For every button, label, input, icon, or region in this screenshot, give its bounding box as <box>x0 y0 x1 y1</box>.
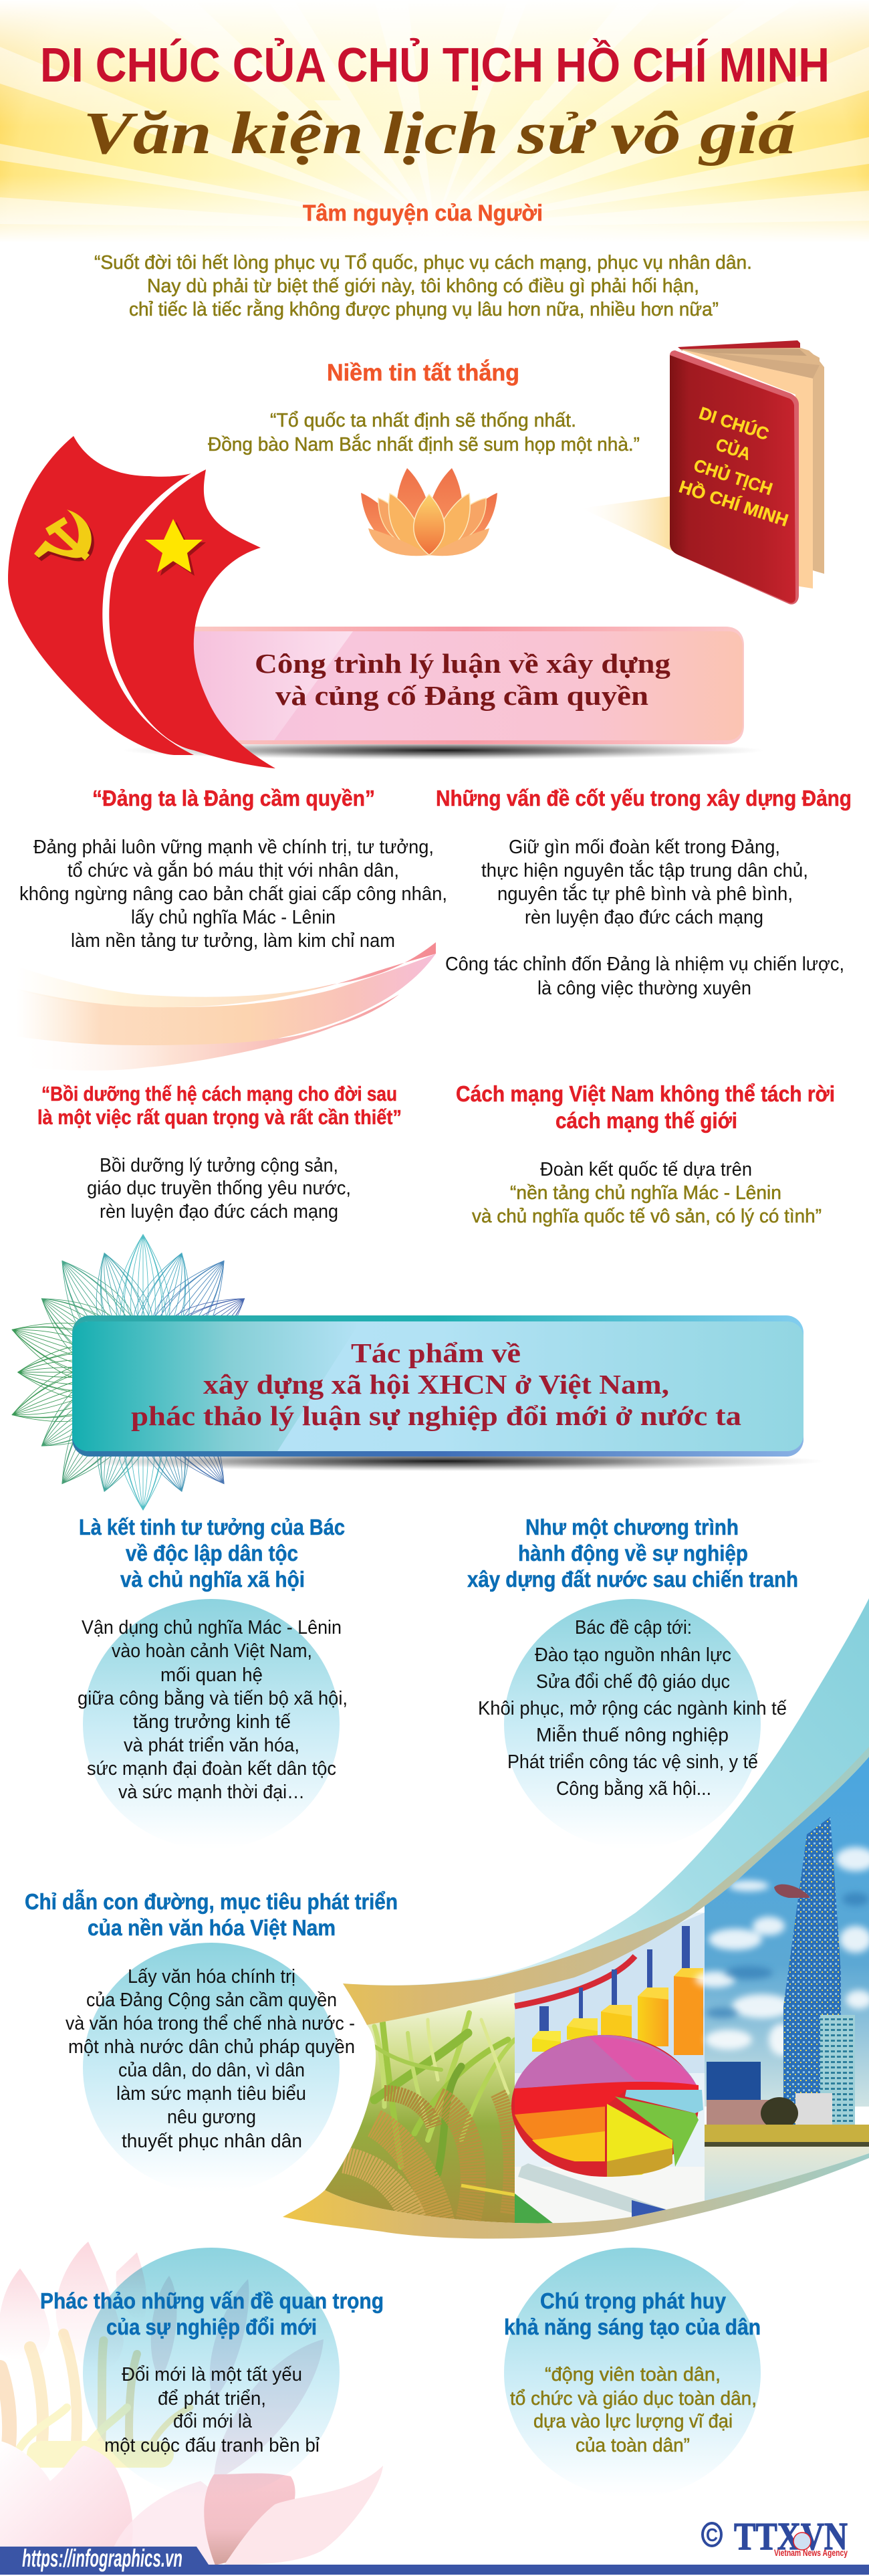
book cover text: CỦA <box>713 433 753 464</box>
column heading: Cách mạng Việt Nam: Cách mạng Việt Nam không thể tách rời <box>456 1081 835 1106</box>
banner heading: phác thảo lý luận sự nghiệp đổi mới ở nước ta <box>131 1400 741 1431</box>
decorative ellipse culture <box>83 1943 340 2193</box>
text block: xây dựng Đảng: Giữ gìn mối đoàn kết trong Đảng, <box>509 837 780 858</box>
text block: Đổi mới: để phát triển, <box>158 2388 266 2409</box>
text block: Bác đề cập tới: Khôi phục, mở rộng các ngành kinh tế <box>478 1698 787 1719</box>
text block: xây dựng Đảng: nguyên tắc tự phê bình và phê bình, <box>497 883 793 905</box>
text block: văn hóa: một nhà nước dân chủ pháp quyền <box>68 2036 355 2058</box>
book cover text: HỒ CHÍ MINH <box>676 476 791 530</box>
logo: TTXVN: C <box>706 2525 718 2545</box>
heading: Như một chương trình: Như một chương trình <box>525 1515 739 1539</box>
icon: red flag ribbon <box>8 436 275 768</box>
heading: Chỉ dẫn con đường: Chỉ dẫn con đường, mục tiêu phát triển <box>25 1889 398 1914</box>
sunburst header background <box>0 0 869 243</box>
panel: blue banner <box>72 1315 803 1457</box>
panel: pink banner <box>187 627 744 744</box>
heading: Là kết tinh tư tưởng: Là kết tinh tư tưởng của Bác <box>79 1515 345 1539</box>
heading: Như một chương trình <box>467 1515 798 1592</box>
text block: Đoàn kết quốc tế: Đoàn kết quốc tế dựa trên <box>540 1159 752 1180</box>
heading: Chú trọng phát huy: Chú trọng phát huy <box>540 2288 727 2313</box>
heading: Chú trọng phát huy <box>504 2288 761 2339</box>
text block: Vận dụng: vào hoàn cảnh Việt Nam, <box>112 1640 312 1662</box>
heading: Phác thảo: của sự nghiệp đổi mới <box>106 2315 317 2339</box>
text block: Đảng cầm quyền <box>19 837 447 952</box>
quote: động viên toàn dân: dựa vào lực lượng vĩ đại <box>533 2411 733 2432</box>
decorative shadow under blue banner <box>62 1451 824 1471</box>
heading: Phác thảo: Phác thảo những vấn đề quan trọng <box>40 2288 384 2313</box>
text block: Vận dụng: mối quan hệ <box>160 1665 263 1686</box>
text block: xây dựng Đảng <box>445 837 844 999</box>
text block: Đảng cầm quyền: làm nền tảng tư tưởng, làm kim chỉ nam <box>71 930 395 952</box>
text block: Bác đề cập tới: Công bằng xã hội... <box>556 1778 711 1800</box>
quote: niềm tin: Đồng bào Nam Bắc nhất định sẽ sum họp một nhà.” <box>208 433 640 455</box>
text block: xây dựng Đảng: rèn luyện đạo đức cách mạng <box>525 907 763 928</box>
column heading: Bồi dưỡng thế hệ: là một việc rất quan trọng và rất cần thiết” <box>37 1105 402 1129</box>
quote: tâm nguyện: Nay dù phải từ biệt thế giới này, tôi không có điều gì phải hối hận, <box>147 276 699 297</box>
text block: văn hóa: thuyết phục nhân dân <box>122 2131 302 2152</box>
text block: Đoàn kết quốc tế <box>472 1159 822 1227</box>
light beam behind book <box>582 496 675 552</box>
text block: Bác đề cập tới: Đào tạo nguồn nhân lực <box>535 1644 731 1666</box>
text block: Vận dụng <box>78 1617 348 1803</box>
icon: orange lotus <box>361 468 497 556</box>
photo collage: rice, charts, city <box>321 1752 869 2234</box>
text block: Vận dụng: và sức mạnh thời đại… <box>118 1782 305 1803</box>
text block: văn hóa <box>66 1966 355 2152</box>
banner heading: và củng cố Đảng cầm quyền <box>275 680 648 711</box>
heading: Chỉ dẫn con đường: của nền văn hóa Việt Nam <box>88 1915 336 1940</box>
icon: teal line lotus mandala <box>4 1235 260 1510</box>
heading: Là kết tinh tư tưởng: về độc lập dân tộc <box>126 1541 298 1566</box>
heading: Niềm tin tất thắng: Niềm tin tất thắng <box>327 359 519 386</box>
text block: Đảng cầm quyền: Đảng phải luôn vững mạnh về chính trị, tư tưởng, <box>33 837 434 858</box>
text block: Đảng cầm quyền: lấy chủ nghĩa Mác - Lênin <box>131 907 336 928</box>
decorative ellipse left <box>83 1599 340 1849</box>
photo: rice field <box>321 1993 516 2234</box>
quote: tâm nguyện: chỉ tiếc là tiếc rằng không được phụng vụ lâu hơn nữa, nhiều hơn nữa” <box>129 298 719 320</box>
quote: tâm nguyện: “Suốt đời tôi hết lòng phục vụ Tổ quốc, phục vụ cách mạng, phục vụ nhân dân. <box>94 252 752 274</box>
text block: văn hóa: Lấy văn hóa chính trị <box>128 1966 295 1988</box>
column heading: Bồi dưỡng thế hệ <box>37 1082 402 1129</box>
text block: Đoàn kết quốc tế: và chủ nghĩa quốc tế vô sản, có lý có tình” <box>472 1206 822 1227</box>
column heading: Cách mạng Việt Nam <box>456 1081 835 1133</box>
decorative shadow under pink banner <box>122 741 764 760</box>
text block: Bác đề cập tới: Miễn thuế nông nghiệp <box>536 1724 729 1746</box>
photo: charts <box>511 1913 705 2234</box>
heading: Như một chương trình: hành động về sự nghiệp <box>518 1541 748 1566</box>
text block: xây dựng Đảng: là công việc thường xuyên <box>537 978 751 999</box>
heading: Phác thảo <box>40 2288 384 2339</box>
subtitle: Văn kiện lịch sử vô giá <box>83 100 796 167</box>
decorative ellipse đổi mới <box>83 2248 340 2498</box>
text block: Bồi dưỡng: Bồi dưỡng lý tưởng cộng sản, <box>100 1155 338 1176</box>
column heading: Đảng ta là Đảng cầm quyền: “Đảng ta là Đảng cầm quyền” <box>92 786 375 811</box>
book cover text <box>676 403 791 530</box>
column heading: Cách mạng Việt Nam: cách mạng thế giới <box>555 1108 737 1133</box>
heading: Như một chương trình: xây dựng đất nước sau chiến tranh <box>467 1567 798 1592</box>
text block: Bồi dưỡng <box>87 1155 351 1222</box>
quote: tâm nguyện <box>94 252 752 320</box>
logo: TTXVN <box>703 2514 848 2558</box>
text block: Bồi dưỡng: rèn luyện đạo đức cách mạng <box>100 1201 338 1222</box>
heading: Tâm nguyện của Người: Tâm nguyện của Người <box>303 201 543 226</box>
quote: động viên toàn dân: “động viên toàn dân, <box>545 2364 721 2385</box>
banner heading <box>131 1337 741 1431</box>
text block: Vận dụng: và phát triển văn hóa, <box>124 1735 299 1756</box>
quote: niềm tin <box>208 410 640 455</box>
banner heading: xây dựng xã hội XHCN ở Việt Nam, <box>203 1369 669 1400</box>
text block: văn hóa: của Đảng Cộng sản cầm quyền <box>86 1990 337 2011</box>
text block: Đảng cầm quyền: không ngừng nâng cao bản chất giai cấp công nhân, <box>19 883 447 905</box>
text block: Bác đề cập tới: Phát triển công tác vệ sinh, y tế <box>507 1751 758 1773</box>
decorative curved band <box>343 1598 869 2025</box>
decorative tan ribbon upper <box>343 1747 869 2025</box>
quote: động viên toàn dân: tổ chức và giáo dục toàn dân, <box>510 2388 757 2409</box>
text block: văn hóa: làm sức mạnh tiêu biểu <box>116 2083 306 2105</box>
text block: Bác đề cập tới: Sửa đổi chế độ giáo dục <box>536 1671 730 1693</box>
text block: Đổi mới <box>104 2364 320 2456</box>
quote: động viên toàn dân: của toàn dân” <box>576 2435 690 2456</box>
text block: văn hóa: của dân, do dân, vì dân <box>118 2060 305 2081</box>
heading: Là kết tinh tư tưởng <box>79 1515 345 1592</box>
decorative pink swoosh <box>17 942 436 1071</box>
text block: văn hóa: và văn hóa trong thể chế nhà nước - <box>66 2013 355 2034</box>
text block: Vận dụng: sức mạnh đại đoàn kết dân tộc <box>87 1758 336 1780</box>
book cover text: CHỦ TỊCH <box>691 454 775 499</box>
text block: Vận dụng: Vận dụng chủ nghĩa Mác - Lênin <box>82 1617 342 1638</box>
heading: Chú trọng phát huy: khả năng sáng tạo của dân <box>504 2315 761 2339</box>
decorative tan ribbon lower <box>283 2153 869 2239</box>
footer bar <box>0 2545 869 2575</box>
text block: văn hóa: nêu gương <box>167 2107 256 2128</box>
heading: Chỉ dẫn con đường <box>25 1889 398 1940</box>
heading: Là kết tinh tư tưởng: và chủ nghĩa xã hội <box>120 1567 305 1592</box>
banner heading: Tác phẩm về <box>351 1337 521 1368</box>
logo: TTXVN: TTXVN <box>734 2514 848 2558</box>
decorative ellipse sáng tạo <box>504 2248 761 2498</box>
text block: Đoàn kết quốc tế: “nền tảng chủ nghĩa Mác - Lênin <box>510 1182 781 1204</box>
text block: xây dựng Đảng: Công tác chỉnh đốn Đảng là nhiệm vụ chiến lược, <box>445 954 844 975</box>
quote: niềm tin: “Tổ quốc ta nhất định sẽ thống nhất. <box>270 410 576 431</box>
icon: hammer and sickle <box>34 510 94 561</box>
text block: Vận dụng: tăng trưởng kinh tế <box>133 1711 291 1733</box>
icon: yellow star <box>145 519 206 576</box>
photo: city skyline <box>695 1752 869 2227</box>
icon: red testament book <box>670 340 824 605</box>
text block: Vận dụng: giữa công bằng và tiến bộ xã hội, <box>78 1687 348 1709</box>
quote: động viên toàn dân <box>510 2364 757 2456</box>
decorative ellipse right <box>504 1599 761 1849</box>
text block: Đổi mới: đổi mới là <box>173 2411 253 2432</box>
column heading: Bồi dưỡng thế hệ: “Bồi dưỡng thế hệ cách mạng cho đời sau <box>41 1082 397 1105</box>
text block: Bác đề cập tới: Bác đề cập tới: <box>575 1617 692 1638</box>
text block: xây dựng Đảng: thực hiện nguyên tắc tập trung dân chủ, <box>481 859 808 881</box>
book cover text: DI CHÚC <box>697 403 771 444</box>
website url: https://infographics.vn <box>22 2545 182 2572</box>
banner heading <box>255 648 671 711</box>
banner heading: Công trình lý luận về xây dựng <box>255 648 671 679</box>
text block: Đổi mới: một cuộc đấu tranh bền bỉ <box>104 2435 320 2456</box>
text block: Bác đề cập tới <box>478 1617 787 1800</box>
decorative pink lotus flower <box>0 2242 383 2568</box>
text block: Đảng cầm quyền: tổ chức và gắn bó máu thịt với nhân dân, <box>68 859 399 881</box>
text block: Bồi dưỡng: giáo dục truyền thống yêu nước, <box>87 1178 351 1199</box>
text block: Đổi mới: Đổi mới là một tất yếu <box>122 2364 302 2385</box>
